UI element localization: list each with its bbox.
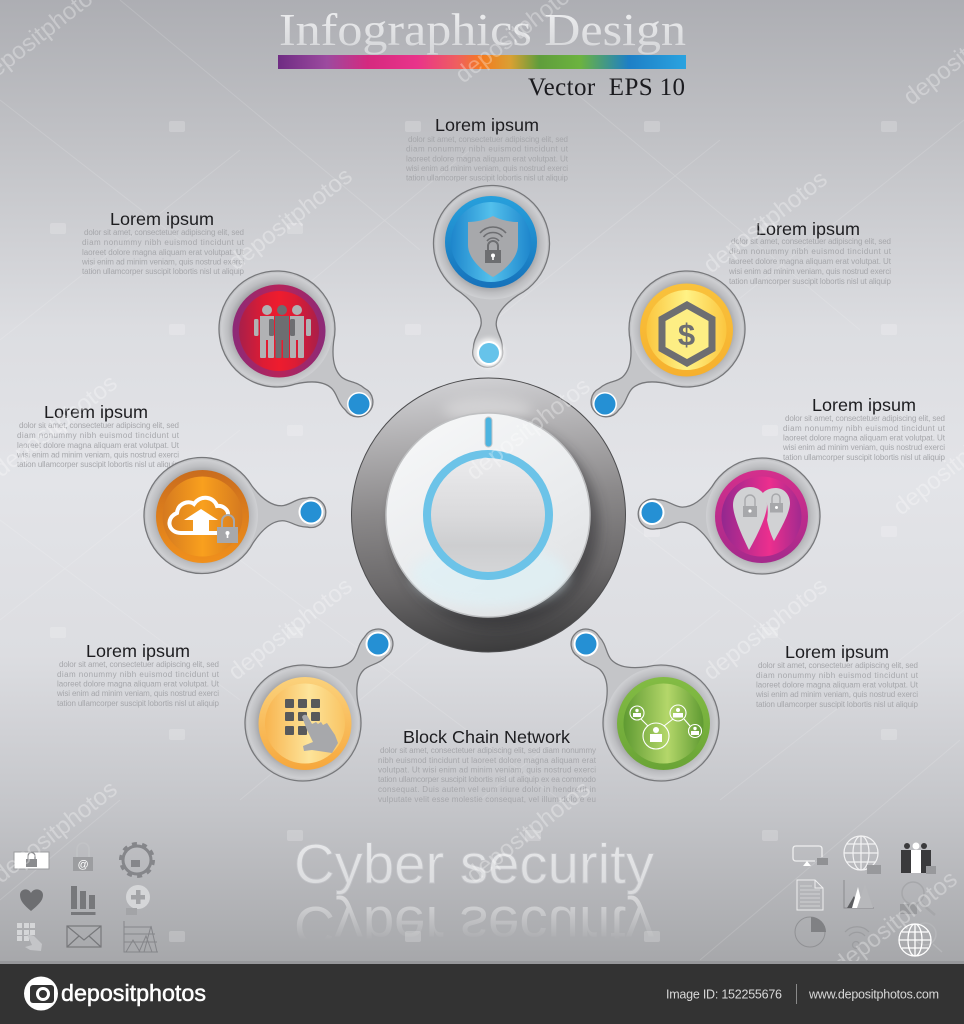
block: lower-left Lorem ipsum: tation ullamcorper suscipit lobortis nisl ut aliquip [57,699,220,708]
block: upper-right Lorem ipsum: tation ullamcorper suscipit lobortis nisl ut aliquip [729,277,892,286]
block: middle-left Lorem ipsum: tation ullamcorper suscipit lobortis nisl ut aliquip [17,460,180,469]
icon: monitor lock [793,846,828,866]
block: top Lorem ipsum: wisi enim ad minim veniam, quis nostrud exerci [405,164,568,173]
title: Infographics Design: Infographics Design [279,4,686,55]
block: Block Chain Network: nibh euismod tincidunt ut laoreet dolore magna aliquam erat [378,756,597,765]
block: lower-left Lorem ipsum: wisi enim ad minim veniam, quis nostrud exerci [56,689,219,698]
icon: globe white [899,924,931,956]
block: lower-right Lorem ipsum: tation ullamcorper suscipit lobortis nisl ut aliquip [756,700,919,709]
photo watermarks: depositphotos [223,162,358,276]
icons: bottom-left set [14,843,158,952]
block: upper-left Lorem ipsum: diam nonummy nibh euismod tincidunt ut [82,238,245,247]
icon: hexagon with dollar [662,305,712,363]
block: lower-left Lorem ipsum: diam nonummy nibh euismod tincidunt ut [57,670,220,679]
block: upper-right Lorem ipsum: diam nonummy nibh euismod tincidunt ut [729,247,892,256]
block: lower-right Lorem ipsum [755,642,919,709]
block: upper-left Lorem ipsum: laoreet dolore magna aliquam erat volutpat. Ut [82,248,245,257]
block: middle-left Lorem ipsum: diam nonummy nibh euismod tincidunt ut [17,431,180,440]
connector dot [298,500,324,524]
icon: two location pins with locks [733,487,790,550]
icon: plus lock [126,885,150,915]
photo watermarks: depositphotos [698,572,833,686]
icon: screen lock [14,852,49,869]
block: top Lorem ipsum: tation ullamcorper suscipit lobortis nisl ut aliquip [406,174,569,183]
connector dot [347,392,371,416]
block: middle-right Lorem ipsum: dolor sit amet, consectetuer adipiscing elit, sed [785,414,945,423]
icon: heart [20,889,43,911]
block: middle-right Lorem ipsum: diam nonummy nibh euismod tincidunt ut [783,424,946,433]
power ring [427,454,549,576]
connector dot [640,500,664,525]
icon: wifi lock [845,927,869,948]
block: middle-left Lorem ipsum: wisi enim ad minim veniam, quis nostrud exerci [16,450,179,460]
icon: people lock [901,842,936,874]
block: top Lorem ipsum: diam nonummy nibh euismod tincidunt ut [406,145,569,154]
icon: magnifier lock [900,882,935,915]
connector dot [474,338,504,368]
block: lower-right Lorem ipsum: diam nonummy nibh euismod tincidunt ut [756,671,919,680]
block: middle-right Lorem ipsum: wisi enim ad minim veniam, quis nostrud exerci [782,443,945,452]
block: upper-right Lorem ipsum: dolor sit amet, consectetuer adipiscing elit, sed [731,237,891,246]
photo watermarks: depositphotos [223,572,358,686]
block: upper-left Lorem ipsum: tation ullamcorper suscipit lobortis nisl ut aliquip [82,267,245,276]
power tick [485,417,492,447]
block: Block Chain Network: volutpat. Ut wisi enim ad minim veniam, quis nostrud exerci [378,766,596,774]
block: Block Chain Network: Block Chain Network [403,727,570,747]
node: team, upper left [195,247,408,455]
block: upper-left Lorem ipsum: dolor sit amet, consectetuer adipiscing elit, sed [84,228,244,237]
block: middle-left Lorem ipsum: Lorem ipsum [44,402,148,422]
block: middle-right Lorem ipsum: Lorem ipsum [812,395,916,415]
icon: cloud with arrow and lock [169,498,238,543]
icon: mountain chart [844,880,874,908]
icon: people network [630,705,702,749]
rainbow bar [278,55,686,69]
icon: magnifier faint [914,923,942,952]
node: map pins, middle right [637,456,821,575]
block: Block Chain Network: vulputate velit esse molestie consequat, vel illum dolore eu [378,795,596,804]
photo watermarks: depositphotos [461,775,596,889]
block: upper-left Lorem ipsum: Lorem ipsum [110,209,214,229]
block: upper-right Lorem ipsum [728,219,892,286]
block: upper-left Lorem ipsum: wisi enim ad minim veniam, quis nostrud exerci [81,258,244,266]
block: Block Chain Network: dolor sit amet, consectetuer adipiscing elit, sed diam nonummy [380,746,596,755]
node: shield, top [429,183,551,369]
icon: email lock: @ [77,859,89,871]
block: upper-left Lorem ipsum [81,209,245,276]
block: top Lorem ipsum: dolor sit amet, consectetuer adipiscing elit, sed [408,135,568,144]
camera watermarks [50,121,897,942]
photo watermarks: depositphotos [461,372,596,486]
block: lower-left Lorem ipsum: Lorem ipsum [86,641,190,661]
icon: envelope [67,926,101,947]
block: lower-right Lorem ipsum: wisi enim ad minim veniam, quis nostrud exerci [755,690,918,699]
block: Block Chain Network: tation ullamcorper suscipit lobortis nisl ut aliquip ex ea commodo [378,775,597,784]
knob [386,413,590,617]
icon: shield with wifi and lock [468,216,518,277]
icon: keypad and pointing hand [285,699,338,753]
block: upper-right Lorem ipsum: laoreet dolore magna aliquam erat volutpat. Ut [729,257,892,266]
block: top Lorem ipsum: Lorem ipsum [435,115,539,135]
footer logo wordmark: depositphotos [61,980,206,1006]
block: top Lorem ipsum [405,115,569,183]
block: middle-right Lorem ipsum: tation ullamcorper suscipit lobortis nisl ut aliquip [783,453,946,462]
block: lower-left Lorem ipsum: laoreet dolore magna aliquam erat volutpat. Ut [57,680,220,688]
block: middle-right Lorem ipsum: laoreet dolore magna aliquam erat volutpat. Ut [783,434,946,442]
icon: document [797,880,823,910]
photo watermarks: depositphotos [698,165,833,279]
block: upper-right Lorem ipsum: wisi enim ad minim veniam, quis nostrud exerci [728,267,891,276]
footer bar [0,961,964,1024]
block: Block Chain Network: consequat. Duis autem vel eum iriure dolor in hendrerit in [378,785,596,794]
connector dot [574,632,598,656]
central power dial [352,378,626,652]
block: lower-right Lorem ipsum: dolor sit amet, consectetuer adipiscing elit, sed [758,661,918,670]
icon: gear lock [120,844,154,876]
footer url: www.depositphotos.com [808,988,939,1002]
connector dot [366,632,390,656]
node: dollar hexagon, upper right [556,247,769,455]
icon: keypad with hand [17,923,42,951]
footer logo icon [24,976,58,1010]
icon: pie chart [795,917,826,947]
node: keypad, lower left [221,593,430,805]
icon: three people [254,305,311,358]
connector dot [593,392,617,416]
block: middle-right Lorem ipsum [782,395,946,462]
title: Cyber security: Cyber security [294,832,654,895]
subtitle: Vector EPS 10: Vector EPS 10 [528,74,685,101]
icon: hexagon with dollar: $ [678,317,695,352]
photo watermarks: depositphotos [828,865,963,979]
icon: bar chart [71,886,96,915]
reflection: Cyber security: Cyber security [294,895,654,958]
block: upper-right Lorem ipsum: Lorem ipsum [756,219,860,239]
footer image id: Image ID: 152255676 [666,988,782,1002]
node: cloud upload, middle left [142,454,327,575]
block: lower-left Lorem ipsum [56,641,220,708]
icon: email lock [73,843,93,871]
block: middle-left Lorem ipsum: laoreet dolore magna aliquam erat volutpat. Ut [17,441,180,450]
icon: line chart [124,921,158,952]
node: network, lower right [534,593,743,805]
block: top Lorem ipsum: laoreet dolore magna aliquam erat volutpat. Ut [406,154,569,163]
icon: globe lock [844,836,881,874]
block: lower-right Lorem ipsum: laoreet dolore magna aliquam erat volutpat. Ut [756,680,919,690]
icons: bottom-right set [793,836,942,956]
block: lower-right Lorem ipsum: Lorem ipsum [785,642,889,662]
block: Block Chain Network [378,727,597,804]
block: middle-left Lorem ipsum: dolor sit amet, consectetuer adipiscing elit, sed [19,421,179,430]
block: lower-left Lorem ipsum: dolor sit amet, consectetuer adipiscing elit, sed [59,660,219,669]
block: middle-left Lorem ipsum [16,402,180,469]
